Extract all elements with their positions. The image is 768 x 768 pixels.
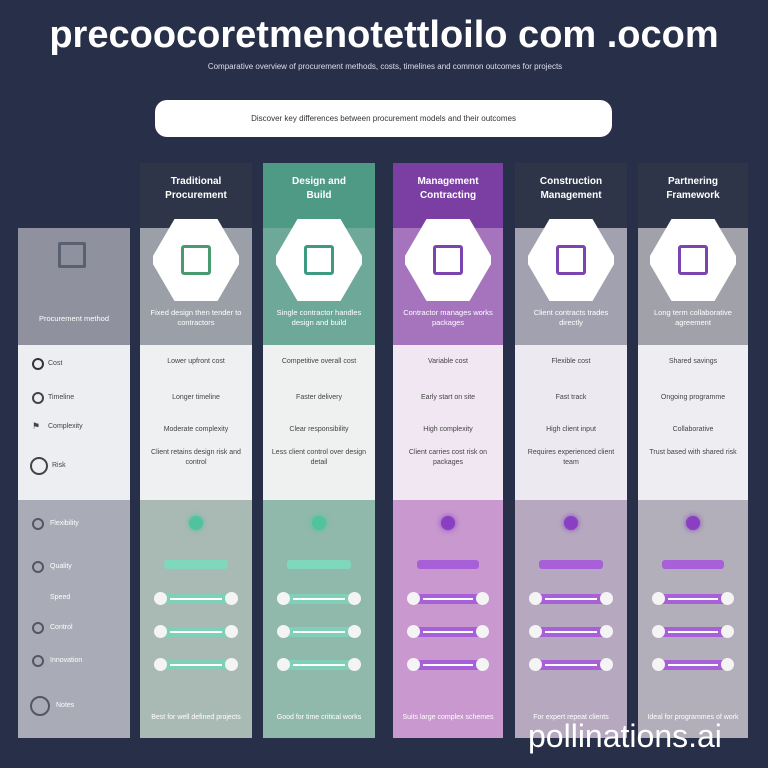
panel: option 1: [140, 176, 252, 738]
panel: option 2: [263, 163, 375, 738]
panel: option 1: Best for well defined projects: [151, 714, 241, 721]
icon: [650, 219, 736, 301]
icon: label header: [58, 242, 86, 268]
icon: [276, 219, 362, 301]
heading: Management: [540, 190, 602, 201]
panel: option 5: Ongoing programme: [661, 394, 725, 401]
title: precoocoretmenotettloilo com .ocom: [49, 14, 719, 56]
panel: option 1: Fixed design then tender to contractors: [151, 308, 241, 327]
list labels: Timeline: [48, 394, 74, 401]
panel: option 4: High client input: [546, 426, 596, 433]
heading: [638, 163, 748, 228]
heading: Traditional: [171, 176, 221, 187]
banner pill: [155, 100, 612, 137]
list labels: ⚑: [32, 421, 40, 431]
heading: Management: [417, 176, 479, 187]
panel: option 3: High complexity: [423, 426, 473, 433]
heading: Construction: [540, 176, 602, 187]
panel: option 4: Client contracts trades directly: [534, 308, 608, 327]
panel: option 4: Requires experienced client team: [528, 449, 614, 466]
panel: option 4: Flexible cost: [552, 358, 590, 365]
panel: label column: Procurement method: [39, 314, 109, 323]
panel: option 3: Suits large complex schemes: [402, 714, 494, 721]
banner pill: Discover key differences between procurement models and their outcomes: [251, 114, 516, 123]
panel: label column: Control: [50, 624, 73, 631]
panel: option 4: [515, 176, 627, 738]
panel: option 5: Shared savings: [669, 358, 717, 365]
panel: option 5: Collaborative: [673, 426, 713, 433]
panel: label column: Flexibility: [50, 520, 79, 527]
heading: Procurement: [165, 190, 227, 201]
list labels: [30, 358, 83, 475]
list labels: Risk: [52, 462, 66, 469]
list labels: Cost: [48, 360, 62, 367]
heading: Framework: [666, 190, 720, 201]
panel: option 5: Trust based with shared risk: [649, 449, 737, 456]
panel: option 4: Fast track: [556, 394, 586, 401]
panel: option 2: Competitive overall cost: [282, 358, 356, 365]
heading: [515, 163, 627, 228]
panel: option 4: For expert repeat clients: [533, 714, 609, 721]
panel: option 3: [393, 163, 503, 738]
panel: option 5: Ideal for programmes of work: [647, 714, 739, 721]
panel: option 2: Faster delivery: [296, 394, 342, 401]
panel: label column: [18, 228, 130, 738]
panel: option 5: Long term collaborative agreement: [654, 308, 732, 327]
icon: [528, 219, 614, 301]
panel: option 3: Early start on site: [421, 394, 475, 401]
heading: Contracting: [420, 190, 476, 201]
panel: option 3: Variable cost: [428, 358, 468, 365]
heading: Build: [306, 190, 332, 201]
list labels: Complexity: [48, 423, 83, 430]
panel: option 5: [638, 176, 748, 738]
panel: option 2: Single contractor handles design and build: [277, 308, 361, 327]
panel: option 1: Lower upfront cost: [167, 358, 225, 365]
panel: option 1: Client retains design risk and control: [151, 449, 241, 466]
panel: label column: Speed: [50, 594, 70, 601]
panel: label column: Quality: [50, 563, 72, 570]
heading: Design and: [292, 176, 346, 187]
icon: [153, 219, 239, 301]
icon: [405, 219, 491, 301]
watermark: pollinations.ai: [528, 718, 722, 754]
panel: option 1: Longer timeline: [172, 394, 220, 401]
heading: Partnering: [668, 176, 718, 187]
panel: label column: Innovation: [50, 657, 82, 664]
heading: [140, 163, 252, 228]
panel: option 3: Contractor manages works packages: [403, 308, 493, 327]
subtitle: Comparative overview of procurement methods, costs, timelines and common outcomes for projects: [208, 62, 562, 71]
panel: option 2: Less client control over design detail: [272, 449, 366, 466]
heading: [393, 163, 503, 228]
panel: option 2: Clear responsibility: [289, 426, 349, 433]
heading: [263, 163, 375, 228]
panel: option 1: Moderate complexity: [164, 426, 228, 433]
panel: option 2: Good for time critical works: [277, 714, 361, 721]
panel: label column: Notes: [56, 702, 74, 709]
panel: option 3: Client carries cost risk on packages: [409, 449, 487, 466]
